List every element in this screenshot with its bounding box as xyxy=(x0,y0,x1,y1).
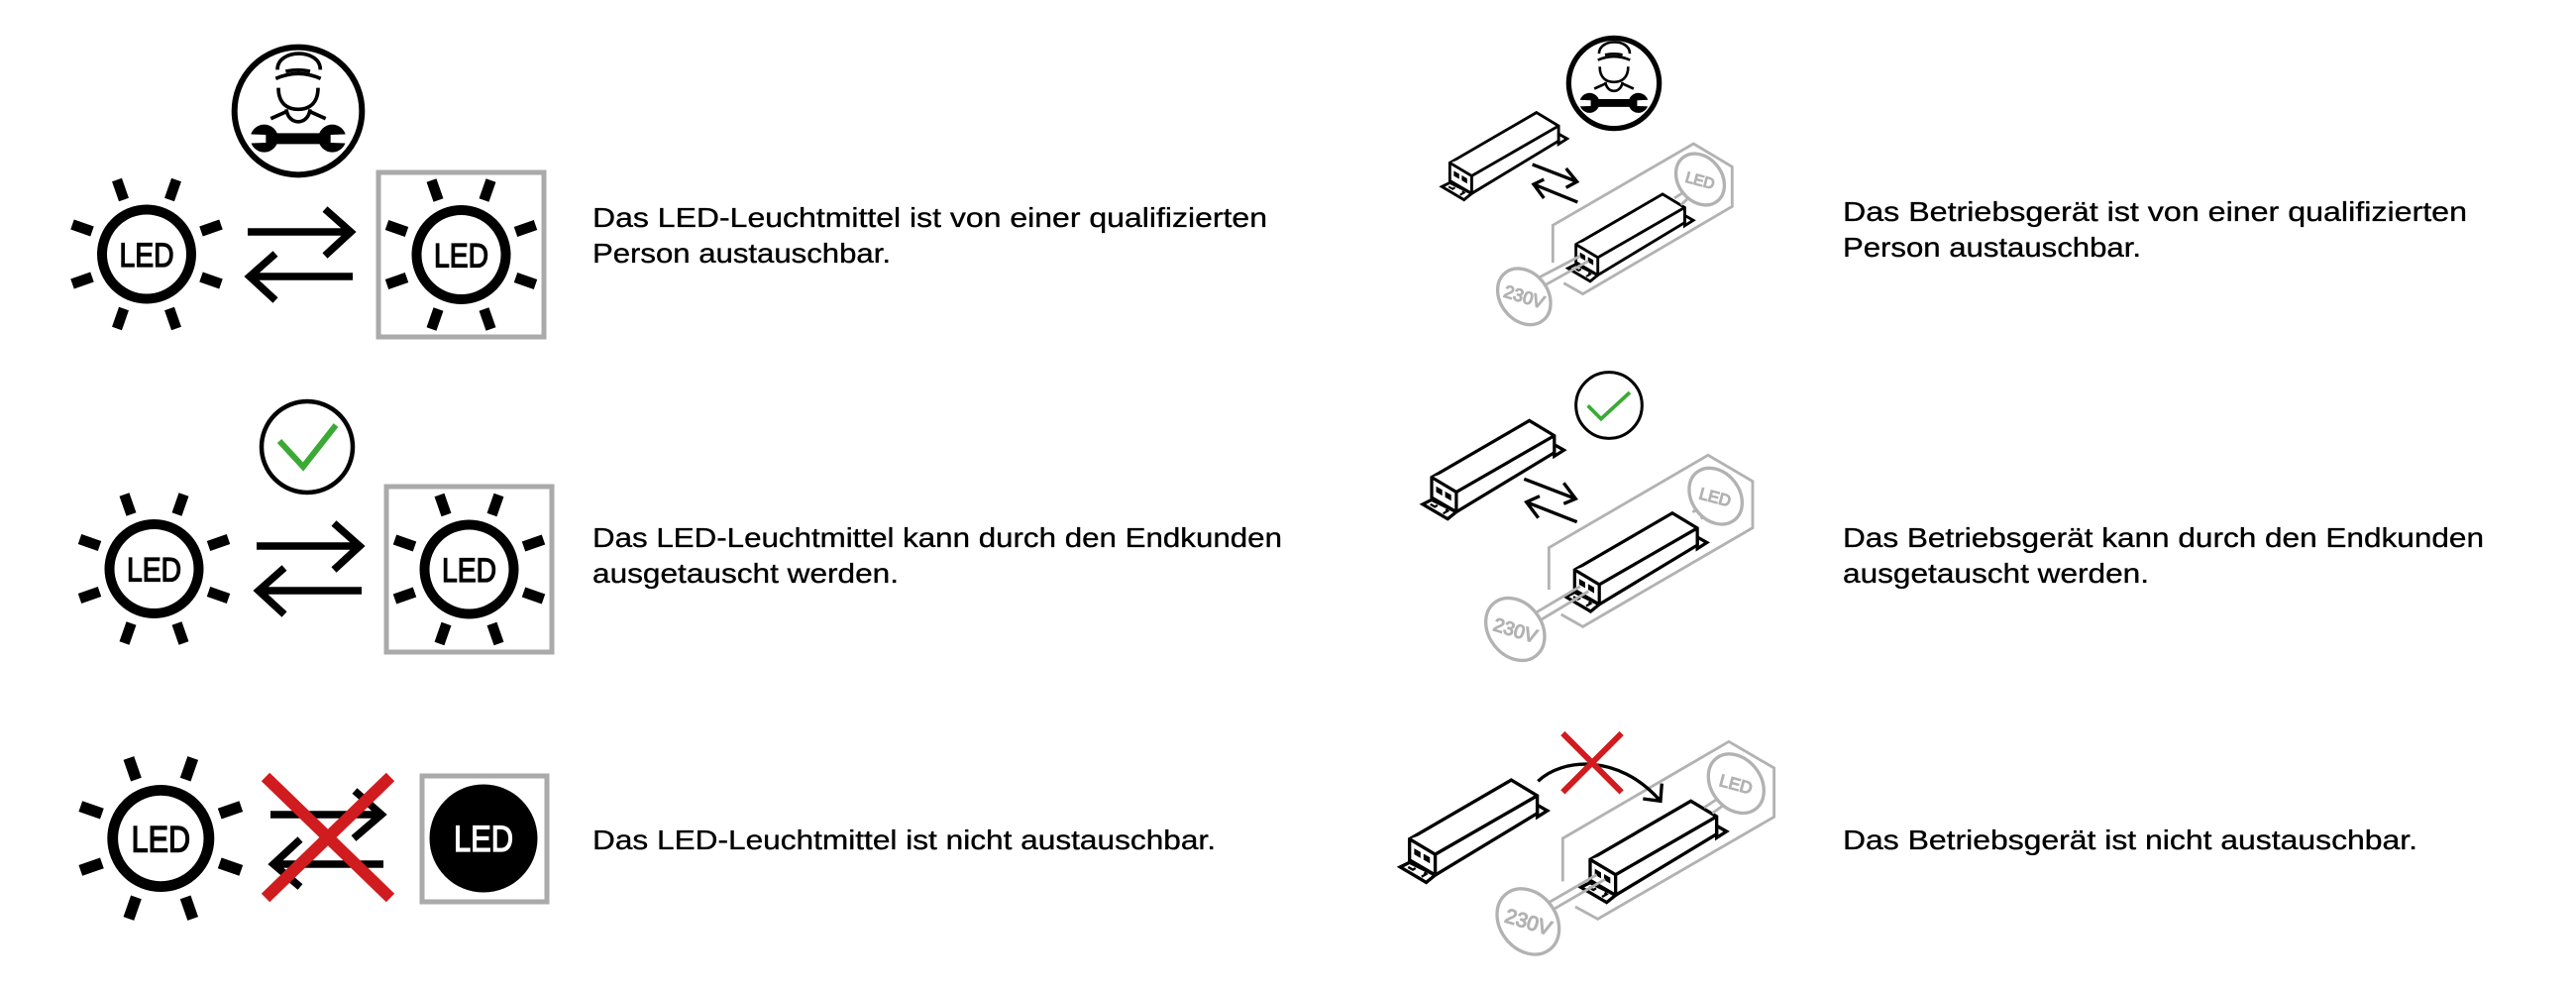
icon: sealed LED in frame xyxy=(422,776,547,902)
connector: LED xyxy=(1665,144,1735,215)
icon: LED sun left xyxy=(72,180,221,329)
panel: driver replaceable by end customer xyxy=(1423,373,2488,672)
text: end customer driver: ausgetauscht werden. xyxy=(1843,558,2149,589)
icon: green check in circle xyxy=(262,401,353,493)
icon: technician with wrench xyxy=(1568,38,1660,129)
connector: LED: LED xyxy=(1683,169,1716,193)
connector: LED: LED xyxy=(1717,770,1755,798)
red cross xyxy=(1562,733,1622,792)
icon: technician with wrench xyxy=(235,48,362,174)
loose driver xyxy=(1423,420,1564,519)
connector: 230V: 230V xyxy=(1491,614,1540,648)
loose driver xyxy=(1400,780,1548,882)
connector: LED: LED xyxy=(1697,485,1733,510)
diagram: driver swap in luminaire xyxy=(1442,113,1735,335)
icon: sealed LED in frame: LED xyxy=(454,819,513,859)
connector: 230V xyxy=(1473,587,1556,672)
icon: LED sun left xyxy=(80,758,241,919)
icon: exchange arrows xyxy=(257,523,362,614)
connector: 230V: 230V xyxy=(1502,905,1555,940)
icon: green check in circle xyxy=(1576,373,1642,438)
icon: LED sun left: LED xyxy=(132,819,190,859)
panel: LED not replaceable xyxy=(80,758,1216,919)
panel: LED replaceable by qualified person xyxy=(72,48,1271,337)
text: qualified person LED: Das LED-Leuchtmittel ist von einer qualifizierten xyxy=(592,202,1267,233)
curved arrow xyxy=(1538,764,1662,801)
icon: LED sun in frame: LED xyxy=(434,237,488,275)
luminaire outline xyxy=(1562,741,1774,919)
text: qualified person driver: Das Betriebsgerät ist von einer qualifizierten xyxy=(1843,196,2467,227)
icon: LED sun left: LED xyxy=(127,551,181,589)
text: end customer driver: Das Betriebsgerät kann durch den Endkunden xyxy=(1843,522,2484,553)
text: end customer LED: Das LED-Leuchtmittel kann durch den Endkunden xyxy=(592,522,1282,553)
mains and LED connections xyxy=(1539,186,1697,285)
installed driver xyxy=(1581,801,1727,903)
icon: crossed-out exchange arrows xyxy=(266,777,390,898)
icon: LED sun left xyxy=(79,495,228,643)
loose driver xyxy=(1442,113,1567,200)
connector: 230V: 230V xyxy=(1501,281,1547,312)
mains and LED connections xyxy=(1548,794,1734,910)
text: end customer LED: ausgetauscht werden. xyxy=(592,558,899,589)
mains and LED connections xyxy=(1536,504,1713,619)
diagram: driver swap with check xyxy=(1423,373,1753,672)
text: qualified person driver: Person austauschbar. xyxy=(1843,232,2141,263)
text: driver not replaceable: Das Betriebsgerät ist nicht austauschbar. xyxy=(1843,825,2417,855)
connector: 230V xyxy=(1487,258,1561,335)
connector: 230V xyxy=(1484,876,1572,967)
connector: LED xyxy=(1697,743,1775,825)
diagram: driver swap crossed out xyxy=(1400,733,1775,967)
connector: LED xyxy=(1678,458,1753,535)
icon: LED sun in frame xyxy=(386,487,552,652)
exchange arrows xyxy=(1533,165,1577,202)
icon: LED sun in frame xyxy=(378,172,544,337)
panel: driver not replaceable xyxy=(1400,733,2417,967)
panel: driver replaceable by qualified person xyxy=(1442,38,2471,335)
exchange arrows xyxy=(1524,479,1577,522)
icon: LED sun left: LED xyxy=(119,237,174,275)
panel: LED replaceable by end customer xyxy=(79,401,1286,652)
text: LED not replaceable: Das LED-Leuchtmittel ist nicht austauschbar. xyxy=(592,825,1216,855)
installed driver xyxy=(1568,194,1693,281)
installed driver xyxy=(1565,513,1707,611)
icon: exchange arrows xyxy=(248,209,353,300)
luminaire outline xyxy=(1549,455,1753,626)
icon: LED sun in frame: LED xyxy=(442,552,496,590)
luminaire outline xyxy=(1553,144,1732,294)
text: qualified person LED: Person austauschbar. xyxy=(592,238,891,269)
